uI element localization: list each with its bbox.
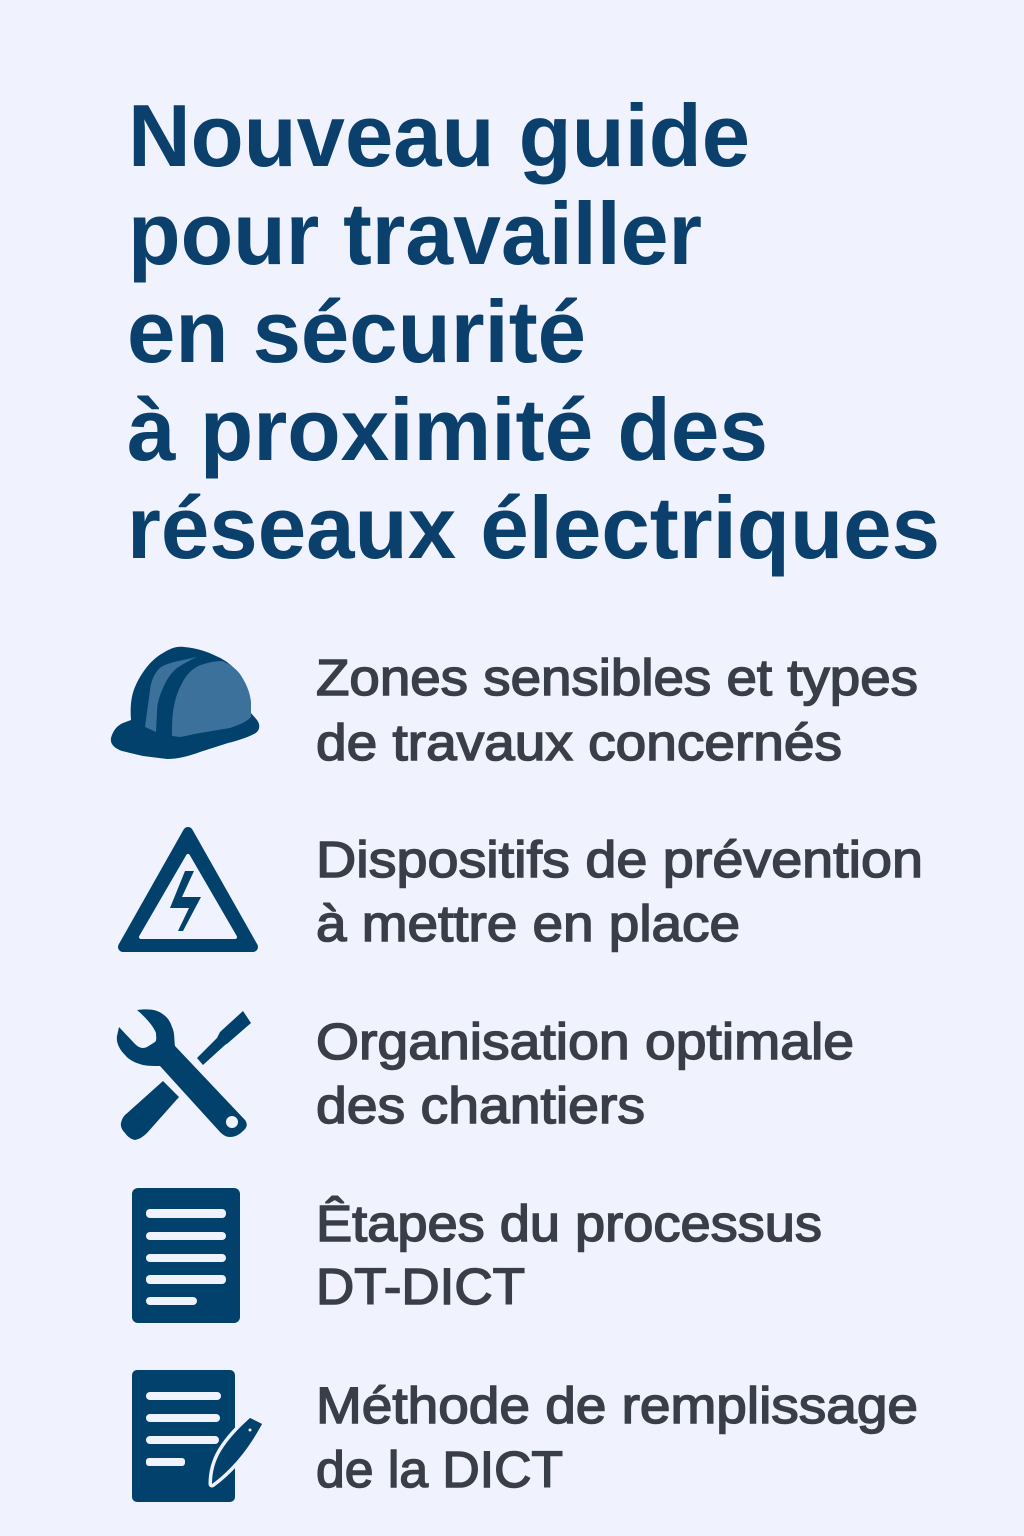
- title: en sécurité: [127, 282, 586, 381]
- text: organisation optimale: des chantiers: [316, 1077, 645, 1134]
- text: dispositifs de prévention: [316, 831, 923, 952]
- text: étapes du processus: Êtapes du processus: [316, 1195, 822, 1252]
- title: pour travailler: [128, 184, 702, 283]
- icon: document with pen: [132, 1370, 262, 1502]
- title: Nouveau guide: [128, 86, 750, 185]
- text: méthode de remplissage: [316, 1377, 918, 1498]
- icon: hard hat: [111, 647, 259, 759]
- text: zones sensibles: Zones sensibles et types: [316, 649, 918, 706]
- text: étapes du processus: DT-DICT: [316, 1258, 525, 1315]
- title: à proximité des: [127, 380, 768, 479]
- text: zones sensibles: [316, 649, 918, 771]
- text: zones sensibles: de travaux concernés: [316, 714, 842, 771]
- icon: document: [132, 1188, 240, 1323]
- text: étapes du processus: [316, 1195, 822, 1315]
- text: organisation optimale: [316, 1013, 854, 1134]
- icon: electrical warning triangle: [123, 832, 253, 947]
- title: réseaux électriques: [127, 478, 940, 577]
- text: méthode de remplissage: de la DICT: [316, 1441, 563, 1498]
- text: dispositifs de prévention: à mettre en place: [316, 895, 740, 952]
- title: [127, 86, 940, 577]
- icon: wrench and screwdriver: [117, 1009, 251, 1140]
- text: organisation optimale: Organisation optimale: [316, 1013, 854, 1070]
- text: dispositifs de prévention: Dispositifs de prévention: [316, 831, 923, 888]
- text: méthode de remplissage: Méthode de remplissage: [316, 1377, 918, 1434]
